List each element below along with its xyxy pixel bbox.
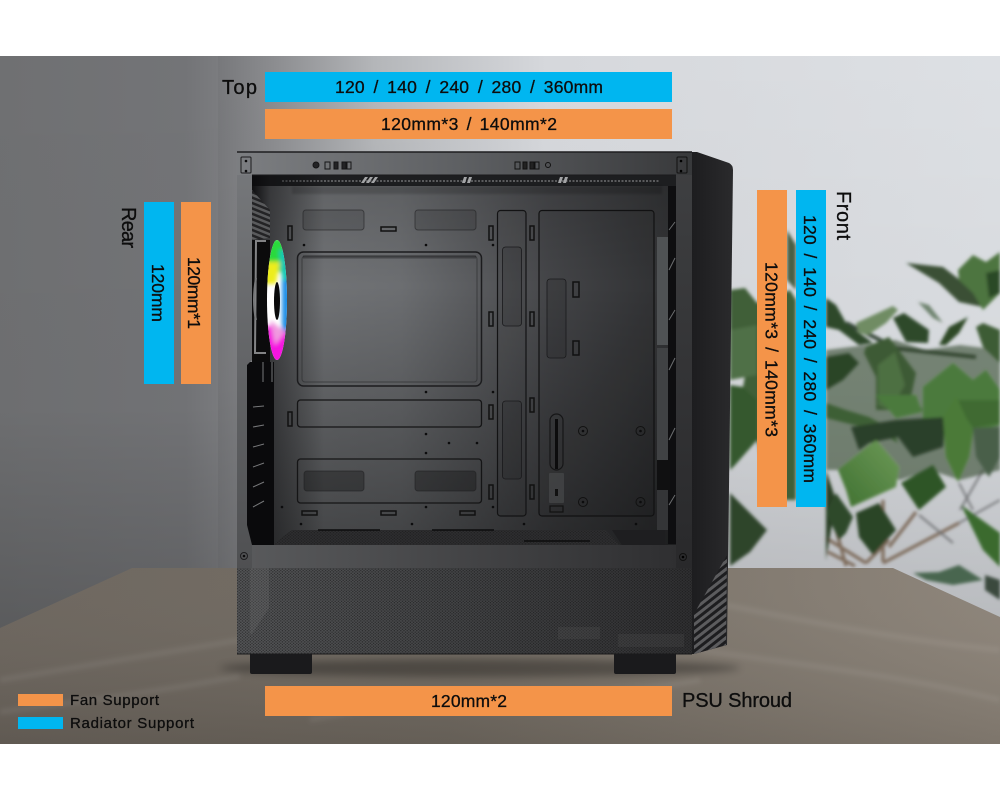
- foliage: [906, 263, 983, 307]
- heading: Rear: Rear: [117, 207, 139, 248]
- white margin bottom: [0, 744, 1000, 800]
- left wall: [0, 56, 218, 646]
- motherboard tray cutouts: [303, 210, 476, 491]
- front fans behind frame: [657, 186, 676, 544]
- heading: PSU Shroud: PSU Shroud: [682, 690, 792, 712]
- top ventilation strip: [252, 175, 676, 186]
- heading: Front: Front: [832, 191, 854, 240]
- plant branches: [826, 500, 959, 566]
- feet: [250, 652, 676, 674]
- top bar with connectors: [237, 152, 692, 175]
- PSU shroud fan bar: 120mm*2: [431, 691, 507, 711]
- front I/O right group: [515, 162, 550, 169]
- rear fan bar: 120mm*1: [184, 257, 204, 329]
- legend: radiator support: Radiator Support: [70, 715, 195, 732]
- cable channel panel: [498, 210, 526, 516]
- front I/O left group: [313, 162, 351, 169]
- side panel: [692, 152, 733, 654]
- rear exhaust stripes: [252, 190, 270, 240]
- left frame: [237, 152, 252, 568]
- top radiator bar: 120 / 140 / 240 / 280 / 360mm: [335, 77, 603, 97]
- rear fan bar: [181, 202, 211, 384]
- case shadow on table: [220, 659, 740, 677]
- wooden table: [0, 568, 1000, 744]
- lower chassis bar: [252, 545, 676, 568]
- rainbow fan: [253, 240, 287, 362]
- rear support labels: [117, 202, 211, 384]
- large motherboard window: [298, 252, 482, 386]
- front radiator bar: [796, 190, 826, 507]
- PSU shroud fan bar: [265, 686, 672, 716]
- top radiator bar: [265, 72, 672, 102]
- background plant: [730, 230, 1000, 600]
- standoff clips and screw holes: [281, 226, 637, 525]
- legend: [18, 692, 195, 732]
- white margin top: [0, 0, 1000, 56]
- PC case: [220, 152, 740, 677]
- front fan bar: 120mm*3 / 140mm*3: [762, 262, 782, 437]
- front radiator bar: 120 / 140 / 240 / 280 / 360mm: [800, 215, 820, 483]
- rear radiator bar: 120mm: [148, 264, 168, 322]
- legend: fan support: Fan Support: [70, 692, 160, 709]
- PSU shroud labels: [265, 686, 792, 716]
- perforated front lower mesh: [237, 568, 692, 654]
- top fan bar: [265, 109, 672, 139]
- rear drive panel: [539, 210, 654, 516]
- left leaf column: [730, 288, 796, 500]
- left interior shading: [252, 175, 324, 545]
- front fan bar: [757, 190, 787, 507]
- heading: Top: Top: [222, 77, 257, 99]
- rear expansion slots: [247, 362, 274, 545]
- bottom vent floor: [272, 530, 665, 545]
- rear radiator bar: [144, 202, 174, 384]
- right frame: [676, 152, 692, 568]
- top fan bar: 120mm*3 / 140mm*2: [381, 114, 557, 134]
- lower tray panels: [298, 400, 482, 503]
- right wall: [218, 56, 1000, 646]
- top support labels: [222, 72, 672, 139]
- front support labels: [757, 190, 854, 507]
- dense foliage backing: [826, 340, 1000, 480]
- legend: fan support: [18, 692, 160, 709]
- interior back plate: [252, 175, 676, 545]
- stripes on side panel: [694, 555, 727, 654]
